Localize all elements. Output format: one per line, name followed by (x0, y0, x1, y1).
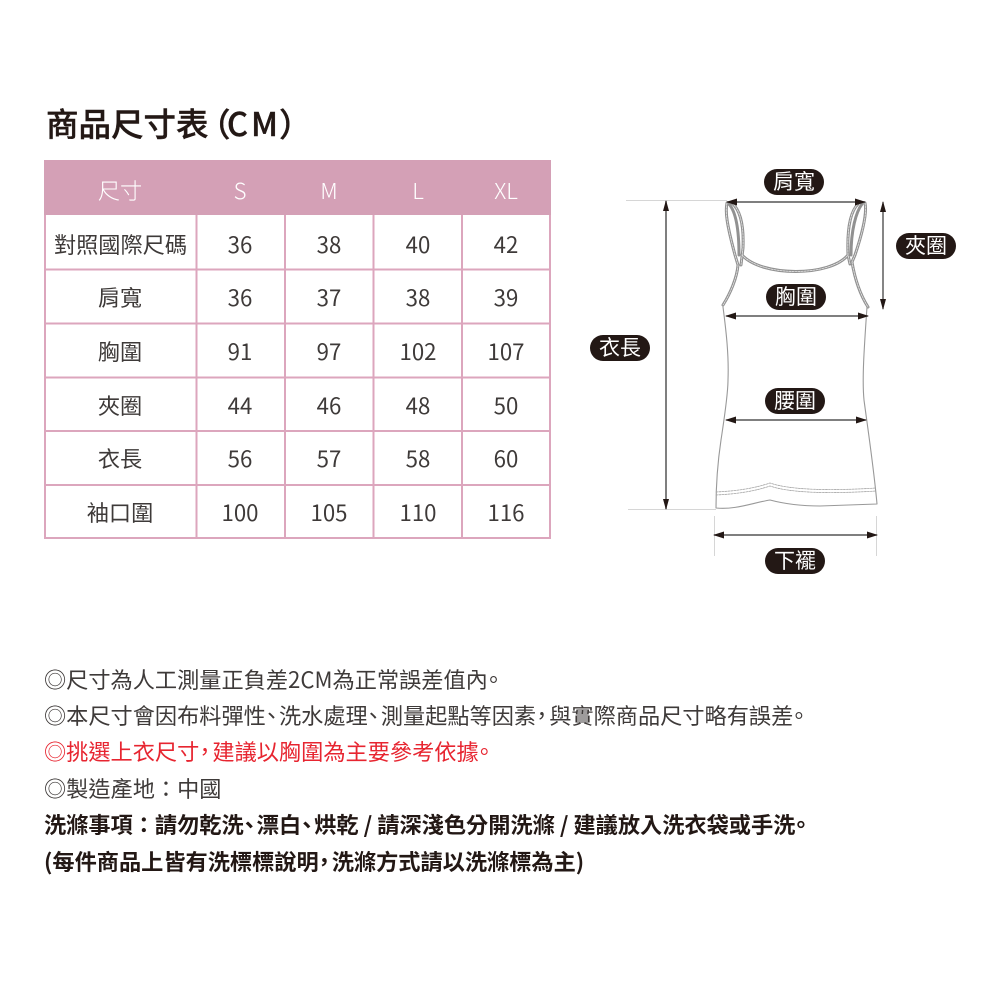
row: 肩寬: 38 (406, 281, 430, 313)
table header: 尺寸 (98, 174, 142, 206)
row: 衣長: 57 (317, 442, 341, 474)
title: ） (279, 99, 312, 146)
size table (44, 160, 551, 538)
row: 肩寬 (98, 281, 518, 313)
title: 商品尺寸表 (46, 99, 209, 146)
row: 夾圈: 46 (317, 389, 341, 421)
row: 對照國際尺碼 (54, 228, 518, 260)
row: 肩寬: 36 (228, 281, 252, 313)
row: 袖口圍 (87, 496, 524, 528)
row: 袖口圍: 袖口圍 (87, 496, 153, 528)
row: 衣長: 58 (406, 442, 430, 474)
table header: M (320, 174, 338, 206)
note 1: ◎尺寸為人工測量正負差2CM為正常誤差值內。 (44, 663, 501, 695)
row: 袖口圍: 105 (311, 496, 347, 528)
row: 對照國際尺碼: 42 (494, 228, 518, 260)
arrow: armhole (882, 202, 884, 309)
row: 胸圍: 胸圍 (98, 335, 142, 367)
tank top diagram (590, 166, 956, 575)
title: （ (198, 99, 231, 146)
table header: XL (494, 174, 518, 206)
notes (44, 663, 808, 877)
title: C (227, 99, 248, 146)
row: 對照國際尺碼: 38 (317, 228, 341, 260)
note 3 in red: ◎挑選上衣尺寸，建議以胸圍為主要參考依據。 (44, 735, 492, 767)
arrow: hem (714, 534, 877, 536)
table grid (44, 215, 551, 538)
row: 對照國際尺碼: 40 (406, 228, 430, 260)
label: 肩寬: 肩寬 (773, 166, 815, 196)
row: 對照國際尺碼: 36 (228, 228, 252, 260)
row: 衣長 (98, 442, 518, 474)
row: 衣長: 60 (494, 442, 518, 474)
row: 袖口圍: 116 (488, 496, 524, 528)
row: 袖口圍: 110 (400, 496, 436, 528)
arrow: length (665, 201, 667, 509)
table header: L (412, 174, 424, 206)
row: 夾圈: 44 (228, 389, 252, 421)
note 2: ◎本尺寸會因布料彈性、洗水處理、測量起點等因素，與實際商品尺寸略有誤差。 (44, 699, 806, 731)
arrow: shoulder width (727, 201, 865, 203)
row: 胸圍: 97 (317, 335, 341, 367)
row: 肩寬: 37 (317, 281, 341, 313)
care note: (每件商品上皆有洗標標說明，洗滌方式請以洗滌標為主) (44, 845, 584, 877)
row: 胸圍: 107 (488, 335, 524, 367)
table header: S (234, 174, 246, 206)
row: 夾圈: 夾圈 (98, 389, 142, 421)
row: 胸圍 (98, 335, 524, 367)
row: 肩寬: 39 (494, 281, 518, 313)
arrow: waist (726, 419, 866, 421)
label: 夾圈: 夾圈 (905, 230, 947, 260)
guide lines (626, 200, 876, 556)
row: 胸圍: 91 (228, 335, 252, 367)
row: 夾圈: 50 (494, 389, 518, 421)
note 4: ◎製造產地：中國 (44, 772, 222, 804)
row: 夾圈 (98, 389, 518, 421)
table header (44, 160, 551, 215)
garment body outline (716, 203, 877, 508)
arrow: chest (726, 315, 868, 317)
row: 袖口圍: 100 (222, 496, 258, 528)
row: 肩寬: 肩寬 (98, 281, 142, 313)
care instructions: 洗滌事項：請勿乾洗、漂白、烘乾 / 請深淺色分開洗滌 / 建議放入洗衣袋或手洗。 (44, 808, 808, 840)
title: M (251, 99, 278, 146)
label: 衣長: 衣長 (599, 332, 641, 362)
row: 對照國際尺碼: 對照國際尺碼 (54, 228, 187, 260)
label: 胸圍: 胸圍 (775, 281, 817, 311)
row: 夾圈: 48 (406, 389, 430, 421)
row: 胸圍: 102 (400, 335, 436, 367)
row: 衣長: 衣長 (98, 442, 142, 474)
label: 下襬: 下襬 (774, 545, 816, 575)
label: 腰圍: 腰圍 (774, 385, 816, 415)
row: 衣長: 56 (228, 442, 252, 474)
